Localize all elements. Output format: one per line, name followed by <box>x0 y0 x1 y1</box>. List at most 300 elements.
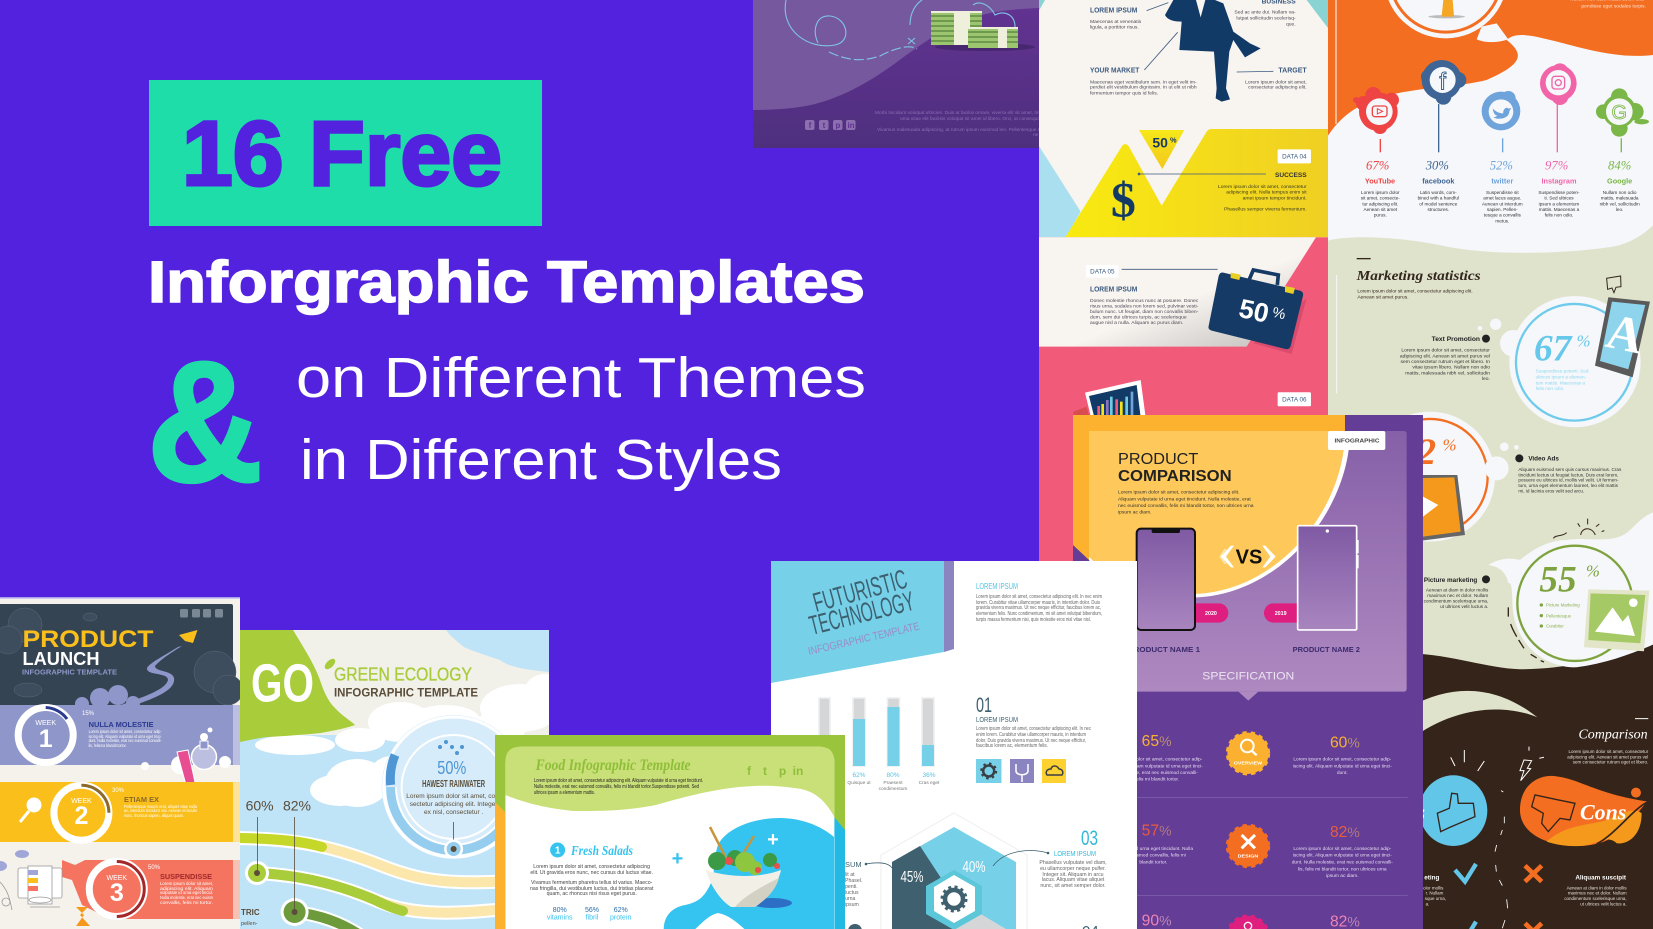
vs label <box>1219 546 1276 569</box>
pros and cons rows: sque urna, <box>1425 896 1446 901</box>
video ads copy: tum, urna eget elementum laoreet, leo elit mattis <box>1518 483 1619 488</box>
social stat: twitter: amet lacus augue. <box>1483 196 1521 201</box>
stat circle: 55%: Curabitur <box>1546 624 1564 629</box>
icon: salad bowl <box>706 827 792 908</box>
orange header shape <box>1327 0 1653 137</box>
social stat: twitter: twitter <box>1491 176 1513 185</box>
picture marketing copy: Aenean at diam in dolor mollis <box>1426 588 1489 593</box>
text: target: Lorem ipsum dolor sit amet, <box>1245 79 1307 85</box>
social stat: YouTube: Aenean sit amet <box>1364 207 1398 212</box>
data 05 section: dum, sem dui ultrices turpis, ac scelerisque <box>1090 314 1187 320</box>
social stat: Instagram <box>1538 63 1580 218</box>
picture marketing copy: condimentum scelerisque urna, <box>1424 598 1488 603</box>
stat markers: 60% and 82%: 60% <box>246 798 274 814</box>
section 01: LOREM IPSUM <box>976 715 1018 724</box>
decorative plus signs <box>672 829 779 870</box>
data 05 section: augue nisl a nulla. Aliquam ac purus diam. <box>1090 320 1183 326</box>
nutrition stats: 62% <box>614 907 628 914</box>
row: overview: iscing elit. Aliquam vulputate id urna eget tinci- <box>1293 763 1392 769</box>
heading: marketing statistics: Aenean sit amet purus. <box>1357 295 1409 301</box>
intro text: lorem. Curabitur vitae ullamcorper mauris, in interdum dolor. Duis <box>976 600 1100 606</box>
data 04 section: Lorem ipsum dolor sit amet, consectetur <box>1218 184 1307 190</box>
section 01 <box>976 694 1091 749</box>
rainwater gauge <box>382 715 526 859</box>
social stat: twitter: tesque a convallis <box>1484 213 1521 218</box>
row: pink badge: 90% <box>1142 912 1172 929</box>
week 2 band: Pellentesque mauris erat, aliquet vitae nulla <box>124 804 198 809</box>
pros and cons rows: olor mollis <box>1423 885 1444 890</box>
text: your market <box>1090 68 1197 96</box>
data 05 section <box>1038 237 1330 604</box>
social stat: YouTube: 67% <box>1366 158 1389 172</box>
data 04 section: SUCCESS <box>1275 172 1307 179</box>
social stat: twitter: sapien. Pellen- <box>1487 207 1518 212</box>
social icons: f <box>809 121 812 130</box>
week 3 band: Nulla molestie, erat nec euism <box>160 895 213 900</box>
heading: marketing statistics <box>1356 259 1481 301</box>
row: overview <box>1104 733 1392 783</box>
stat circle: 55%: 55 <box>1539 560 1577 601</box>
picture marketing copy <box>1424 575 1490 609</box>
header wave <box>505 747 834 817</box>
phone 1 <box>1137 529 1195 630</box>
week 1 band: dunt. Nulla molestie, erat nec euismod convalli- <box>89 738 162 743</box>
social icons <box>805 120 856 130</box>
data 05 section: risus urna, sodales non lorem sed, pulvinar vesti- <box>1090 304 1199 310</box>
text: left fragment <box>241 908 260 927</box>
panel: food infographic template <box>495 735 845 929</box>
row: overview: lis, felis mi blandit tortor. <box>1128 777 1179 783</box>
pros and cons rows: condimentum scelerisque urna, <box>1564 896 1627 901</box>
week 3 band: Lorem ipsum dolor sit amet, <box>160 881 213 886</box>
section 03 <box>993 827 1107 889</box>
header card <box>1089 431 1407 701</box>
data 04 section: adipiscing elit. Nulla tempus enim sit <box>1226 190 1307 196</box>
rainwater gauge: HAWEST RAINWATER <box>422 779 486 790</box>
section body text: quam, ac rhoncus nisi risus eget purus. <box>547 891 637 897</box>
row: design: vulputate id urna eget tincidunt. Nulla <box>1114 846 1193 852</box>
header note: pendisse eget sodales turpis. <box>1581 3 1646 9</box>
product names <box>1128 645 1360 654</box>
section 01: dolor. Duis gravida viverra maximus. Ut nec neque efficitur, <box>976 738 1086 744</box>
stat circle: 67%: 67 <box>1534 329 1573 370</box>
text: business <box>1234 0 1296 27</box>
social stat: YouTube: Lorem ipsum dolor <box>1361 190 1400 195</box>
week 3 band: convallis, felis mi tortor. <box>160 900 213 905</box>
social stat: Google: nibh vel, sollicitudin <box>1600 201 1640 206</box>
pros and cons rows: eting <box>1424 874 1439 881</box>
nutrition stats: 56% <box>585 907 599 914</box>
text promotion copy: mattis, malesuada nibh vel, sollicitudin <box>1405 370 1490 376</box>
text promotion copy: sem consectetur rutrum eget et libero. In <box>1400 359 1490 365</box>
stat circle: 67%: % <box>1577 332 1591 351</box>
data 06 tag and chart tablet <box>1073 380 1311 420</box>
header note <box>1570 0 1646 9</box>
data 04 section: % <box>1170 135 1177 144</box>
stat circle: 67% <box>1478 296 1641 427</box>
data 05 section: DATA 05 <box>1090 269 1115 276</box>
video ads copy: mi, id lacinia eros velit sed arcu. <box>1518 488 1584 493</box>
week 1 band: 1 <box>39 725 53 753</box>
social stat: Instagram: mattis. Maecenas a <box>1539 207 1580 212</box>
data 05 section: Donec molestie rhoncus nunc at posuere. Donec <box>1090 298 1199 304</box>
week 1 band: Lorem ipsum dolor sit amet, consectetur adip- <box>89 729 162 734</box>
social stat: facebook: structures. <box>1427 207 1449 212</box>
panel: business template column <box>1039 0 1328 561</box>
social stat: twitter: Aenean ut interdum <box>1482 201 1523 206</box>
heading: product comparison: nec euismod convallis, felis mi blandit tortor, non ultrices urna <box>1118 503 1254 509</box>
social stat: YouTube <box>1353 87 1400 218</box>
text: business: Sed ac ante dui. Nullam va- <box>1234 10 1296 16</box>
row: design: Lorem ipsum dolor sit amet, consectetur adip- <box>1293 846 1392 852</box>
heading: Inforgraphic Templates: Inforgraphic Templates <box>148 250 865 315</box>
row: overview: iscing elit. Aliquam vulputate id urna eget tinci- <box>1104 763 1203 769</box>
nutrition stats <box>547 907 632 922</box>
row: design: dunt. Nulla molestie, erat nec euismod convalli- <box>1292 859 1393 865</box>
icon: documents and monitor outline <box>0 866 62 910</box>
arrows <box>1144 3 1273 72</box>
panel: social marketing template column <box>1328 0 1653 929</box>
icon: money stacks <box>931 11 1035 51</box>
data 04 section: 50 <box>1152 134 1168 150</box>
social stat: twitter: metus. <box>1495 218 1509 223</box>
heading: product comparison: COMPARISON <box>1118 468 1232 485</box>
section 02 fragment: penti. <box>845 884 858 890</box>
intro text: elementum felis. Nunc condimentum, mi sit amet volutpat bibendum, <box>976 611 1102 617</box>
orange circle contents: % <box>1443 436 1457 455</box>
bar chart: 36% <box>922 772 936 779</box>
stat markers: 60% and 82%: 82% <box>283 798 311 814</box>
row: overview: Lorem ipsum dolor sit amet, consectetur adip- <box>1104 757 1203 763</box>
section 02 fragment: ipsum <box>845 902 859 908</box>
section 01: 01 <box>976 694 992 717</box>
stat circle: 55%: Pellentesque <box>1546 613 1572 618</box>
row: overview: OVERVIEW <box>1234 761 1263 766</box>
tag: infographic: INFOGRAPHIC <box>1334 438 1379 444</box>
text: business: lutpat sollicitudin scelerisq- <box>1236 15 1296 21</box>
clouds <box>255 674 565 807</box>
data 04 section <box>1038 129 1330 237</box>
text: target: consectetur adipiscing elit. <box>1248 85 1307 91</box>
stat circle: 82% partial <box>1365 412 1495 542</box>
rainwater gauge: 50% <box>437 758 466 778</box>
title: green ecology <box>251 654 478 714</box>
social stat: facebook: facebook <box>1422 176 1455 185</box>
week 2 band: 2 <box>74 802 88 830</box>
nutrition stats: vitamins <box>547 914 573 922</box>
section 03: eu ullamcorper neque pulfer. <box>1040 866 1106 872</box>
title: product launch: LAUNCH <box>22 649 100 669</box>
week 3 band: SUSPENDISSE <box>160 874 212 881</box>
section heading: fresh salads <box>550 842 633 859</box>
rainwater gauge: Lorem ipsum dolor sit amet, con- <box>406 793 501 800</box>
stat markers: 60% and 82% <box>245 798 311 926</box>
title: green ecology: GO <box>251 654 314 714</box>
stat circle: 55%: Picture Marketing <box>1546 603 1580 608</box>
section 03: lacus. Aliquam vitae aliquet <box>1042 877 1105 883</box>
data 04 section: amet ipsum tempor tincidunt. <box>1243 195 1307 201</box>
video ads copy: Aliquam euismod sem quis cursus maximus. Cras <box>1518 467 1622 472</box>
text: left fragment: pellen- <box>241 921 258 927</box>
row: overview: 65% <box>1142 733 1172 750</box>
panel: product comparison template <box>1073 415 1423 929</box>
row: design: 57% <box>1142 822 1172 839</box>
text promotion copy: Lorem ipsum dolor sit amet, consectetur <box>1401 348 1490 354</box>
bar chart: 62% <box>852 772 866 779</box>
social icons: t <box>763 764 767 778</box>
stat circle: 55%: % <box>1586 562 1600 581</box>
vs label: VS <box>1236 547 1262 569</box>
week 2 band: nunc, rhoncus sapien, aliquet quam. <box>124 813 184 818</box>
heading: product comparison: ipsum ac diam. <box>1118 510 1152 516</box>
bar chart <box>819 698 940 792</box>
pros and cons rows <box>1423 791 1627 929</box>
title: product launch <box>22 626 154 676</box>
section 03: LOREM IPSUM <box>1054 849 1096 858</box>
intro text <box>534 778 703 796</box>
social stat: facebook: 30% <box>1425 158 1449 172</box>
panel: green ecology template <box>240 630 549 929</box>
heading: comparison: sem consectetur rutrum eget et libero. <box>1573 760 1648 765</box>
week 3 band: adipiscing elit. Aliquam <box>160 886 213 891</box>
week 1 band: lis, felisma blandit tortor. <box>89 743 127 748</box>
stat circle: 55% <box>1488 510 1653 667</box>
bar chart: Praesent <box>883 780 903 786</box>
heading: product comparison: Aliquam vulputate id urna eget tincidunt. Nulla molestie, erat <box>1118 496 1251 502</box>
rainwater gauge: sectetur adipiscing elit. Integer <box>410 801 498 808</box>
icon: cons thumbs down blob: Cons <box>1580 799 1626 824</box>
section 03: Integer sit. Aliquam in arcu <box>1042 872 1104 878</box>
heading: specification: SPECIFICATION <box>1202 670 1294 682</box>
social stat: Google: 84% <box>1608 158 1631 172</box>
social stat: Instagram: Instagram <box>1541 176 1577 185</box>
bar chart: Quisque ut <box>847 780 871 786</box>
intro text: ultrices ipsum a elementum mattis. <box>534 790 595 796</box>
social stat: Google: leo. <box>1616 207 1623 212</box>
social stat: Instagram: ti. Sed ultrices <box>1544 196 1574 201</box>
section body text: Vivamus fermentum pharetra tellus id varius. Maeco- <box>531 880 653 886</box>
text promotion copy: adipiscing elit. Aenean sit amet purus vel <box>1400 353 1490 359</box>
rainwater gauge: ex nisl, consectetur . <box>424 809 483 816</box>
footer text <box>875 110 1073 138</box>
panel: purple finance template fragment <box>753 0 1040 148</box>
text promotion copy: Text Promotion <box>1432 336 1480 343</box>
text: your market: YOUR MARKET <box>1090 68 1140 75</box>
row: design <box>1114 822 1393 879</box>
icon: cloud <box>0 850 29 871</box>
text: lorem ipsum block: Maecenas at venenatis <box>1090 19 1142 25</box>
text: lorem ipsum block <box>1090 6 1142 31</box>
text promotion copy: leo. <box>1482 376 1490 382</box>
social stat: twitter: 52% <box>1490 158 1513 172</box>
data 06 tag and chart tablet: DATA 06 <box>1282 397 1307 404</box>
section 02 fragment: urna <box>845 896 855 902</box>
pros and cons rows: r. Nullam <box>1426 891 1444 896</box>
intro text <box>976 582 1102 623</box>
social stat: facebook: bined with a handful <box>1418 196 1459 201</box>
intro text: gravida viverra maximus. Ut nec neque efficitur, faucibus lorem ac, <box>976 605 1101 611</box>
data 04 section: Phasellus semper viverra fermentum. <box>1224 207 1307 213</box>
social icons <box>180 609 223 618</box>
bar chart: condimentum <box>879 786 907 792</box>
text: lorem ipsum block: ligula, a porttitor risus. <box>1090 25 1139 31</box>
intro text: Nulla molestie, erat nec euismod convallis, felis mi blandit tortor.Suspendisse potenti. Sed <box>534 784 699 790</box>
row: pink badge <box>1142 912 1360 929</box>
decorative plus signs: + <box>672 848 683 870</box>
title: product launch: INFOGRAPHIC TEMPLATE <box>22 668 117 676</box>
section 03: 03 <box>1081 827 1098 850</box>
social icons: p <box>836 121 841 130</box>
social icons: p <box>779 764 786 778</box>
social stat: Google: Nullam non odio <box>1603 190 1637 195</box>
week 2 band: 30% <box>112 788 125 794</box>
heading: marketing statistics: Lorem ipsum dolor sit amet, consectetur adipiscing elit. <box>1357 289 1473 295</box>
social stat: facebook: f <box>1439 68 1446 95</box>
heading: marketing statistics: Marketing statistics <box>1356 269 1481 284</box>
pill: 2019: 2019 <box>1275 611 1287 617</box>
social stat: facebook: of model sentence <box>1419 201 1458 206</box>
section heading: fresh salads: Fresh Salads <box>570 844 633 859</box>
phone 2 <box>1298 526 1359 630</box>
picture marketing copy: maximus nec et dolor. Nullam <box>1427 593 1488 598</box>
dark brown section <box>1410 640 1653 929</box>
social icons <box>747 764 803 778</box>
heading: comparison: Lorem ipsum dolor sit amet, consectetur <box>1569 749 1649 754</box>
text promotion copy <box>1400 335 1490 382</box>
heading: comparison: adipiscing elit. Aenean sit amet purus vel <box>1567 754 1648 759</box>
section 02 fragment <box>845 860 892 929</box>
week 3 band: vulputate id urna eget tincid. <box>160 890 213 895</box>
row: overview: 60% <box>1330 735 1360 752</box>
icon: paper plane <box>179 630 198 643</box>
stat circle: 67%: tum mattis. Maecenas a <box>1536 380 1585 385</box>
week 1 band: 15% <box>82 711 95 717</box>
header card <box>0 604 243 711</box>
row: design: iscing elit. Aliquam vulputate id urna eget tinci- <box>1293 853 1392 859</box>
row: overview: dunt. <box>1337 770 1348 776</box>
week 2 band: WEEK <box>71 798 92 805</box>
section body text: elit. Ut gravida eros nunc, nec cursus dui luctus vitae. <box>530 870 653 876</box>
panel: futuristic technology template <box>771 561 1137 929</box>
section 01: faucibus lorem ac, elementum felis. <box>976 743 1048 749</box>
text: left fragment: TRIC <box>241 908 260 917</box>
social icons: in <box>847 121 855 130</box>
subheading line 1: on Different Themes <box>296 346 866 410</box>
heading: comparison <box>1567 719 1649 765</box>
video ads copy: posuere eu ultrices id, mollis vel velit. Ut fermen- <box>1518 478 1619 483</box>
title: green ecology: INFOGRAPHIC TEMPLATE <box>334 686 478 700</box>
week 1 band: NULLA MOLESTIE <box>89 722 154 729</box>
pros and cons rows: Aliquam suscipit <box>1575 874 1627 881</box>
row: design: ipsum ac diam. <box>1326 873 1359 879</box>
intro text: Lorem ipsum dolor sit amet, consectetur adipiscing elit. Aliquam vulputate id urna eget tincidunt. <box>534 778 703 784</box>
icon: phone with letter A <box>1595 276 1650 377</box>
section 01: Lorem ipsum dolor sit amet, consectetur adipiscing elit. In nec <box>976 726 1091 732</box>
row: design: lis, felis mi blandit tortor, non ultrices urna <box>1298 866 1387 872</box>
video ads copy <box>1515 454 1622 493</box>
social stat: Google: Google <box>1607 176 1632 185</box>
heading: comparison: Comparison <box>1578 727 1648 742</box>
social stat: YouTube: sit amet, consecte- <box>1361 196 1400 201</box>
hexagon chart: 40% <box>962 859 986 876</box>
title badge: 16 Free: 16 Free <box>182 103 502 205</box>
section 03: Phasellus vulputate vel diam, <box>1039 860 1107 866</box>
nutrition stats: 80% <box>553 907 567 914</box>
social icons: t <box>823 121 826 130</box>
title: green ecology: GREEN ECOLOGY <box>334 665 472 685</box>
week 3 band <box>62 860 240 919</box>
text: your market: fermentum tempor quis id felis. <box>1090 90 1158 96</box>
social stat: Google: mattis, malesuada <box>1601 196 1639 201</box>
intro text: Lorem ipsum dolor sit amet, consectetur adipiscing elit. In nec enim <box>976 594 1102 600</box>
icon: briefcase <box>1208 270 1307 354</box>
pros and cons rows: Aenean at diam in dolor mollis <box>1567 885 1627 890</box>
row: overview: Nulla molestie, erat nec euismod convalli- <box>1109 770 1198 776</box>
social stat: Instagram: ipsum a elementum <box>1539 201 1579 206</box>
icon: briefcase: 50 <box>1236 293 1272 329</box>
row: design: DESIGN <box>1238 854 1259 859</box>
icon: cons thumbs down blob <box>1520 747 1648 846</box>
social stat: YouTube: purus. <box>1374 213 1387 218</box>
section 02 fragment: Phasel. <box>845 878 862 884</box>
week 1 band: WEEK <box>35 720 56 727</box>
social stat: Instagram: felis non odio. <box>1545 213 1573 218</box>
intro text: LOREM IPSUM <box>976 582 1018 591</box>
stat circle: 67%: felis non odio. <box>1536 386 1564 391</box>
heading: product comparison: PRODUCT <box>1118 451 1199 468</box>
decorative plus signs: + <box>767 829 779 851</box>
picture marketing copy: ut ultrices velit luctus a. <box>1440 604 1488 609</box>
pros and cons rows: ut ultrices velit luctus a. <box>1580 902 1627 907</box>
intro text: turpis massa fermentum nisi, quis molestie eros nisl vitae nisl. <box>976 617 1091 623</box>
section 02 fragment: lit at <box>845 872 855 878</box>
text: lorem ipsum block: LOREM IPSUM <box>1090 6 1137 15</box>
data 05 section: LOREM IPSUM <box>1090 285 1137 294</box>
product names: PRODUCT NAME 2 <box>1293 645 1360 654</box>
title: food infographic template: Food Infographic Template <box>535 757 691 774</box>
dashed flight line <box>785 0 1015 60</box>
social icons: in <box>793 764 803 778</box>
week 1 band <box>0 705 240 785</box>
title banner: INFOGRAPHIC TEMPLATE <box>807 621 921 658</box>
social stat: facebook <box>1418 60 1466 212</box>
top circle illustration <box>1384 0 1508 42</box>
orange circle contents <box>1399 432 1519 543</box>
tag: infographic <box>1328 431 1385 450</box>
week 3 band: WEEK <box>106 875 127 882</box>
orange circle contents: 82 <box>1399 432 1436 473</box>
icon: pros thumbs up blob: s <box>1416 800 1425 824</box>
section 02 fragment: luctus <box>845 890 859 896</box>
nutrition stats: fibril <box>586 914 599 922</box>
green hill <box>240 630 355 742</box>
week 2 band: ac, interdum tincidunt nisi. Aenean et iaculis <box>124 808 197 813</box>
icon: phone with letter A: A <box>1602 302 1649 364</box>
social stat: Instagram: 97% <box>1545 158 1568 172</box>
business figure <box>1165 0 1261 102</box>
hero heading block <box>147 80 866 518</box>
data 04 section: $ <box>1111 172 1136 228</box>
week 2 band <box>0 782 240 842</box>
icon: landscape photo <box>1584 589 1649 651</box>
title: product launch: PRODUCT <box>22 626 154 653</box>
section 01: enim lorem. Curabitur vitae ullamcorper mauris, in interdum <box>976 732 1086 738</box>
pros and cons rows: maximus nec et dolor. Nullam <box>1568 891 1627 896</box>
subheading line 2: in Different Styles <box>300 428 782 492</box>
week 1 band: iscing elit. Aliquam vulputate id urna eget tinci- <box>89 734 162 739</box>
row: overview: Lorem ipsum dolor sit amet, consectetur adip- <box>1293 757 1392 763</box>
title badge: 16 Free <box>149 80 542 226</box>
